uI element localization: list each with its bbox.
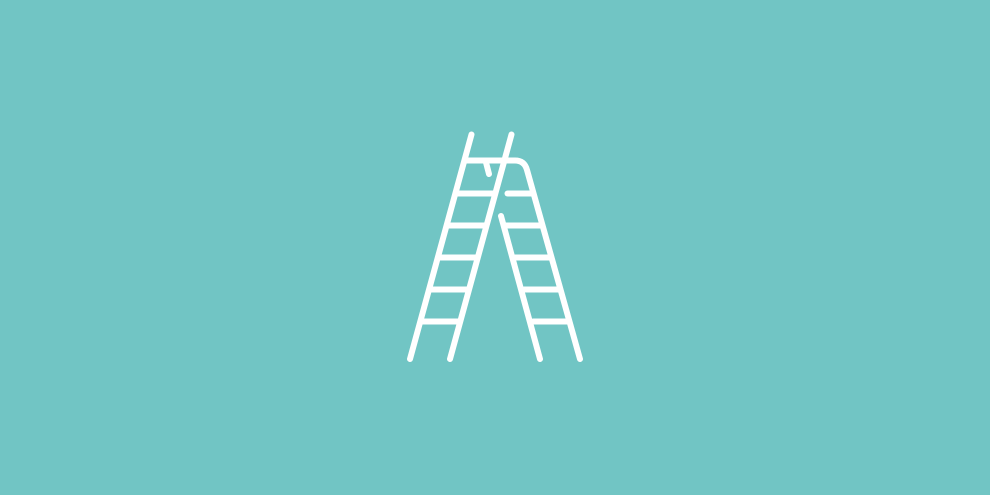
left ladder bbox=[410, 134, 512, 359]
icon: stepladder bbox=[410, 134, 580, 359]
right ladder bbox=[486, 160, 580, 359]
